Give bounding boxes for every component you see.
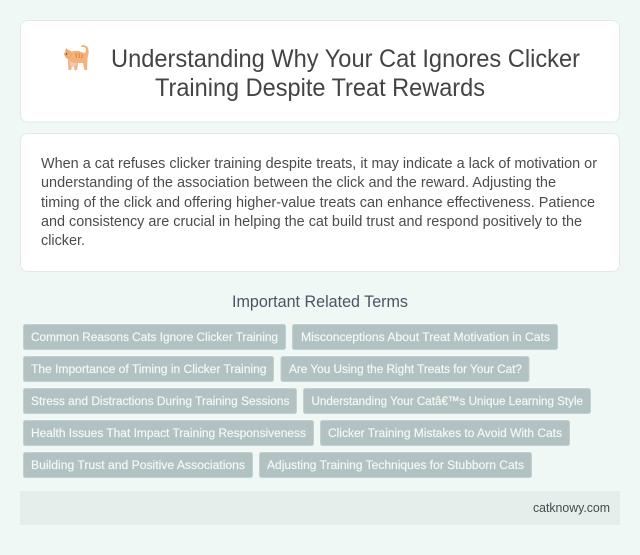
tag [24,324,286,350]
tag: Adjusting Training Techniques for Stubborn Cats [267,458,524,472]
tag [24,420,314,446]
tag: Misconceptions About Treat Motivation in Cats [301,330,550,344]
tags: related terms [24,324,590,478]
title: Training Despite Treat Rewards [155,74,485,102]
tag: Common Reasons Cats Ignore Clicker Training [31,330,278,344]
heading: related terms: Important Related Terms [232,293,408,311]
tag: Clicker Training Mistakes to Avoid With Cats [328,426,562,440]
text block: summary: timing of the click and offering higher-value treats can enhance effectiveness. Patience [41,195,595,211]
tag [24,388,296,414]
tag [281,356,529,382]
text block: summary [41,156,597,249]
title [111,45,580,102]
panel: summary text [20,134,620,272]
footer: catknowy.com [533,501,610,515]
tag [320,420,570,446]
tag [292,324,558,350]
text block: summary: and consistency are crucial in helping the cat build trust and respond positively to the [41,214,582,230]
tag [260,452,532,478]
tag [24,452,252,478]
tag: The Importance of Timing in Clicker Training [31,362,266,376]
title: Understanding Why Your Cat Ignores Clicker [111,45,580,73]
tag: Stress and Distractions During Training Sessions [31,394,290,408]
panel: title card [20,20,620,122]
footer [20,491,620,525]
icon: cat [64,45,89,70]
text block: summary: clicker. [41,233,85,249]
tag: Understanding Your Catâ€™s Unique Learning Style [312,394,583,408]
tag [304,388,590,414]
tag: Health Issues That Impact Training Responsiveness [31,426,306,440]
tag: Are You Using the Right Treats for Your Cat? [289,362,522,376]
text block: summary: When a cat refuses clicker training despite treats, it may indicate a lack of motivation or [41,156,597,172]
tag: Building Trust and Positive Associations [31,458,245,472]
tag [24,356,274,382]
text block: summary: understanding of the association between the click and the reward. Adjusting the [41,175,556,191]
